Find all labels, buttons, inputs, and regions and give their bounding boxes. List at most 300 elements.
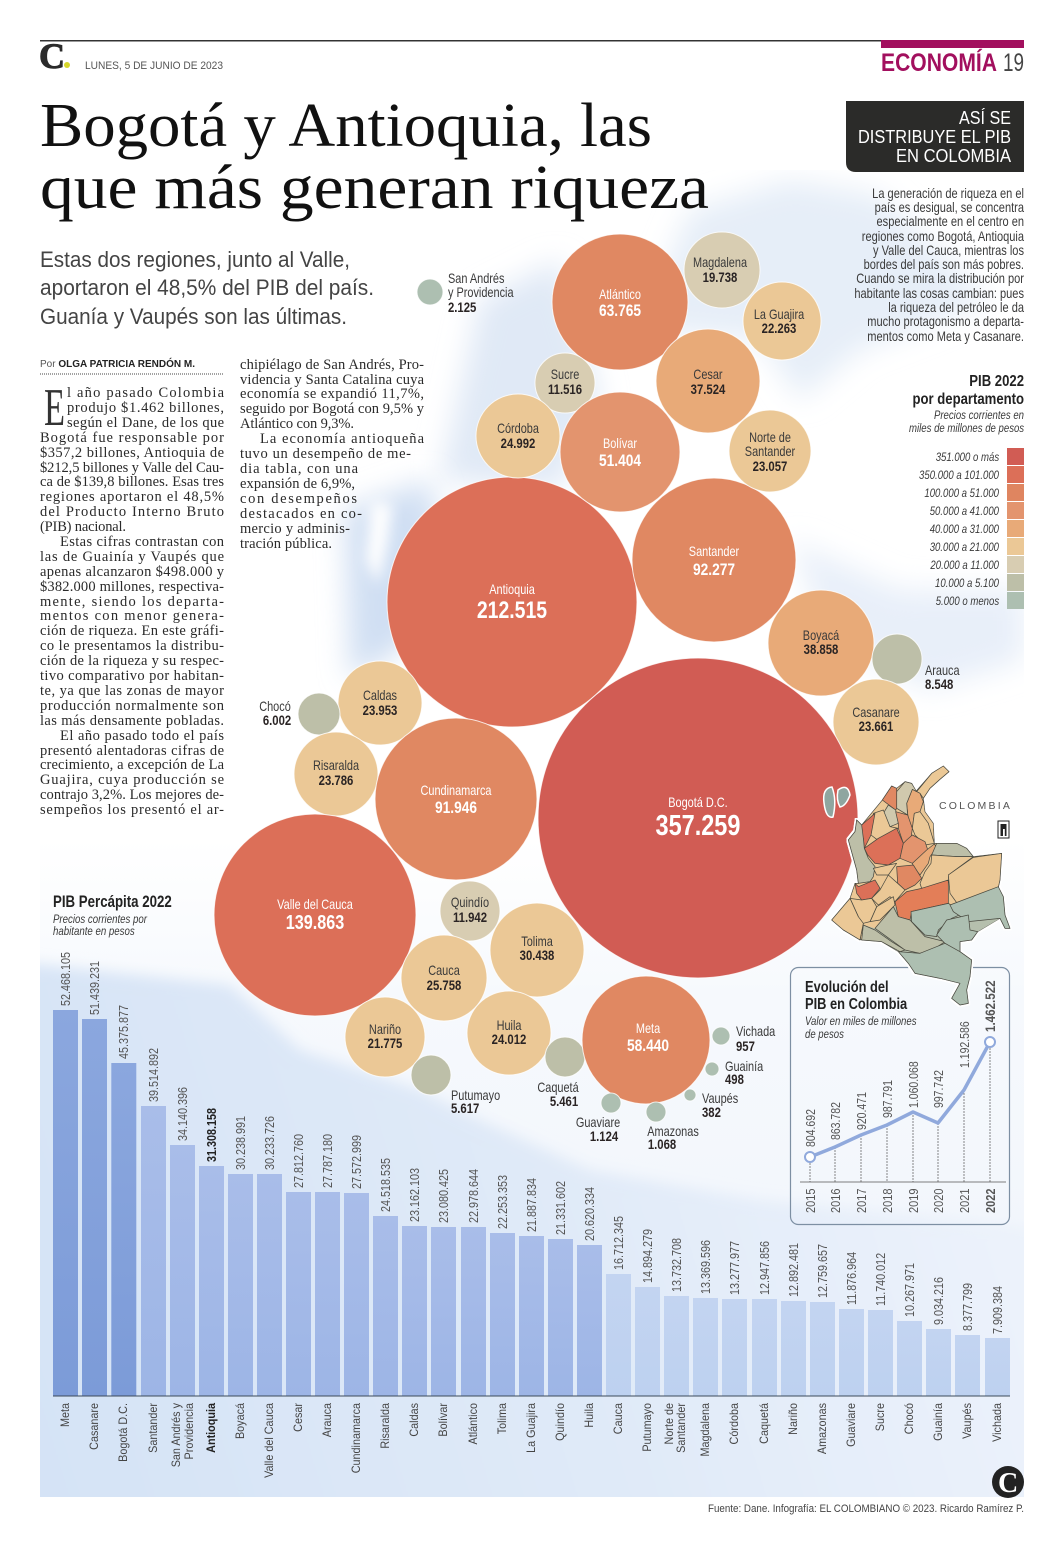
- bubble: Atlántico: [552, 234, 688, 370]
- bubble: La Guajira: [743, 282, 821, 360]
- bubble: Chocó: Chocó: [259, 699, 291, 714]
- legend: PIB 2022 por departamento: 50.000 a 41.000: [930, 505, 999, 518]
- bubble: Vaupés: 382: [702, 1104, 721, 1120]
- bar labels: Chocó: [904, 1403, 916, 1434]
- header box: Así se distribuye el PIB: ASÍ SE: [959, 108, 1011, 128]
- bar labels: Antioquia: [206, 1402, 218, 1453]
- subtitle: aportaron el 48,5% del PIB del país.: [40, 275, 374, 300]
- bar labels: Vaupés: [962, 1403, 974, 1439]
- bubble: Córdoba: [476, 394, 560, 478]
- bubble: Nariño: [345, 997, 425, 1077]
- map: Bolívar: [896, 812, 912, 843]
- bubble: Bogotá D.C.: Bogotá D.C.: [668, 795, 728, 810]
- bubble: Arauca: Arauca: [925, 663, 960, 678]
- bubble: Amazonas: Amazonas: [647, 1124, 699, 1139]
- map: Caldas: [873, 863, 897, 875]
- bars: [53, 1010, 1010, 1396]
- bubble: Casanare: 23.661: [859, 718, 893, 734]
- bar labels: Vichada: [992, 1402, 1004, 1442]
- article column 2: [240, 357, 425, 552]
- intro paragraph right: la riqueza del petróleo le da: [888, 300, 1024, 315]
- bubble: Norte de Santander: [729, 410, 811, 492]
- bar values: 12.759.657: [815, 1244, 830, 1298]
- bar labels: Cundinamarca: [351, 1402, 363, 1473]
- bubble: Santander: 92.277: [693, 561, 735, 579]
- bar labels: Norte de: [664, 1403, 676, 1444]
- bar values: 11.740.012: [873, 1253, 888, 1306]
- intro paragraph right: La generación de riqueza en el: [872, 186, 1024, 201]
- bubble: Caldas: [338, 661, 422, 745]
- bar values: 12.947.856: [757, 1241, 772, 1295]
- bubble: Huila: [467, 991, 551, 1075]
- bubble: Guainía: 498: [725, 1071, 744, 1087]
- map: Vichada: [950, 887, 1010, 928]
- bar values: 27.787.180: [320, 1134, 335, 1188]
- chart years: 2015: [804, 1188, 818, 1213]
- article column 1: las de Guainía y Vaupés que: [40, 549, 224, 565]
- masthead rule: [40, 40, 1024, 48]
- bar labels: San Andrés y: [171, 1403, 183, 1467]
- bar labels: Risaralda: [380, 1402, 392, 1449]
- article column 1: apenas alcanzaron $498.000 y: [40, 564, 225, 580]
- intro paragraph right: habitante las cosas cambian: pues: [854, 286, 1024, 301]
- chart years: 2021: [958, 1189, 972, 1213]
- bubble: Sucre: Sucre: [551, 367, 579, 382]
- bar values: 45.375.877: [116, 1005, 131, 1059]
- article column 1: ción de riqueza. En este gráfi-: [40, 623, 224, 639]
- subtitle: [40, 247, 374, 329]
- per capita heading: habitante en pesos: [53, 925, 135, 938]
- map: Casanare: [920, 855, 973, 888]
- bubble: Magdalena: 19.738: [703, 269, 737, 285]
- bar labels: Guaviare: [846, 1403, 858, 1447]
- bar labels: Huila: [584, 1402, 596, 1428]
- header box: Así se distribuye el PIB: DISTRIBUYE EL PIB: [858, 127, 1011, 147]
- chart years: 2017: [855, 1189, 869, 1213]
- map: Antioquia: [864, 828, 903, 865]
- legend: PIB 2022 por departamento: [909, 373, 1025, 609]
- byline: Por OLGA PATRICIA RENDÓN M.: [40, 357, 195, 370]
- map: Córdoba: [871, 810, 898, 839]
- article column 2: La economía antioqueña: [260, 431, 425, 447]
- chart years: 2016: [829, 1188, 843, 1213]
- article column 1: del Producto Interno Bruto: [40, 504, 224, 520]
- map: Putumayo: [862, 925, 905, 952]
- chart heading: PIB en Colombia: [805, 996, 908, 1013]
- bar labels: Boyacá: [235, 1402, 247, 1439]
- section label: 19: [1003, 49, 1024, 77]
- bar values: 21.887.834: [524, 1178, 539, 1232]
- bubble: Boyacá: 38.858: [804, 641, 838, 657]
- map: Norte de Santander: [912, 812, 934, 845]
- chart values: 997.742: [933, 1070, 946, 1108]
- line chart panel: Evolución del PIB: [790, 968, 1010, 1224]
- chart heading: de pesos: [805, 1028, 844, 1041]
- bar labels: Bolívar: [438, 1403, 450, 1437]
- per capita heading: Precios corrientes por: [53, 913, 147, 926]
- bubble: Putumayo: 5.617: [451, 1100, 479, 1116]
- bar values: 24.518.535: [378, 1158, 393, 1212]
- bar values: 31.308.158: [204, 1108, 219, 1162]
- map: Sucre: [883, 805, 898, 827]
- bubble: Vichada: Vichada: [736, 1024, 775, 1039]
- bubble: Cauca: 25.758: [427, 977, 461, 993]
- bubble: San Andrés y Providencia: [417, 271, 514, 315]
- line: GDP evolution: [810, 1042, 990, 1157]
- bubble: Atlántico: Atlántico: [599, 287, 641, 302]
- title: que más generan riqueza: [40, 154, 709, 222]
- article column 2: Atlántico con 9,3%.: [240, 416, 354, 432]
- bar labels: Putumayo: [642, 1403, 654, 1452]
- article column 1: l año pasado Colombia: [67, 385, 225, 401]
- map: Vichada tan: [948, 853, 1002, 905]
- article column 1: contrajo 3,2%. Los mejores de-: [40, 787, 224, 803]
- article column 1: según el Dane, de los que: [67, 415, 224, 431]
- drop cap: E: [44, 379, 65, 437]
- map: Huila: [870, 897, 895, 922]
- bar labels: Guainía: [933, 1402, 945, 1441]
- bubble: Cauca: Cauca: [428, 963, 460, 978]
- map: Meta: [895, 880, 948, 920]
- bubble: Tolima: 30.438: [520, 947, 554, 963]
- bar values: 30.238.991: [233, 1116, 248, 1170]
- bar values: 9.034.216: [931, 1277, 946, 1325]
- chart values: 804.692: [805, 1109, 818, 1147]
- bar values: 21.331.602: [553, 1181, 568, 1235]
- bar labels: Casanare: [89, 1403, 101, 1450]
- bubble: Huila: 24.012: [492, 1031, 526, 1047]
- bar values: 22.978.644: [466, 1169, 481, 1223]
- bubble: Norte de Santander: 23.057: [753, 458, 787, 474]
- article column 1: $212,5 billones y Valle del Cau-: [40, 460, 224, 476]
- bubble: Norte de Santander: Santander: [745, 444, 795, 459]
- legend: PIB 2022 por departamento: 10.000 a 5.100: [935, 577, 999, 590]
- map: Atrato: [857, 813, 875, 848]
- article column 1: producción normalmente son: [40, 698, 225, 714]
- bubble: Arauca: [872, 634, 960, 692]
- legend: PIB 2022 por departamento: 40.000 a 31.000: [930, 523, 999, 536]
- bar values: 27.812.760: [291, 1134, 306, 1188]
- bar labels: La Guajira: [526, 1402, 538, 1453]
- bubble: Antioquia: [387, 477, 637, 727]
- chart years: 2022: [984, 1188, 998, 1213]
- bar labels: Cauca: [613, 1402, 625, 1434]
- bar values: 34.140.396: [175, 1087, 190, 1141]
- bar labels: Arauca: [322, 1402, 334, 1437]
- bubble: Amazonas: 1.068: [648, 1136, 676, 1152]
- map: Chocó: [848, 820, 875, 883]
- article column 1: (PIB) nacional.: [40, 519, 126, 535]
- chart values: 920.471: [856, 1092, 869, 1130]
- bubble: Antioquia: 212.515: [477, 596, 547, 623]
- article column 2: dia tabla, con una: [240, 461, 359, 477]
- article column 1: Estas cifras contrastan con: [60, 534, 225, 550]
- bubble: Magdalena: [684, 232, 760, 308]
- bubble: Atlántico: 63.765: [599, 302, 641, 320]
- bubble: Cesar: 37.524: [691, 381, 725, 397]
- map: Santander: [900, 835, 928, 863]
- bubble: Guainía: [705, 1059, 763, 1087]
- article column 1: las más densamente pobladas.: [40, 713, 224, 729]
- map label: COLOMBIA: COLOMBIA: [939, 800, 1012, 812]
- bubble: Valle del Cauca: [214, 814, 416, 1016]
- header box: Así se distribuye el PIB: [846, 101, 1024, 172]
- title: [40, 92, 709, 222]
- bubble: Vaupés: Vaupés: [702, 1091, 738, 1106]
- legend: PIB 2022 por departamento: Precios corrientes en: [934, 409, 1024, 422]
- map: Valle: [855, 880, 880, 900]
- bar values: 10.267.971: [902, 1263, 917, 1317]
- bar values: 8.377.799: [960, 1283, 975, 1331]
- bubble: Vichada: 957: [736, 1038, 755, 1054]
- chart values: 987.791: [882, 1080, 895, 1118]
- article column 2: seguido por Bogotá con 9,5% y: [240, 401, 425, 417]
- bar labels: [60, 1402, 1004, 1478]
- chart heading: Valor en miles de millones: [805, 1015, 917, 1028]
- bubble: Antioquia: Antioquia: [489, 582, 535, 597]
- bubble: Boyacá: [768, 590, 874, 696]
- article column 1: regiones aportaron el 48,5%: [40, 489, 224, 505]
- bubble: Quindío: 11.942: [453, 909, 487, 925]
- bar values: 23.080.425: [436, 1169, 451, 1223]
- bar chart: PIB per capita: [53, 952, 1010, 1478]
- bubble: Bogotá D.C.: 357.259: [656, 809, 740, 842]
- intro paragraph right: país es desigual, se concentra: [875, 200, 1024, 215]
- article column 2: destacados en co-: [240, 506, 362, 522]
- icon: San Andrés islands inset: [824, 787, 850, 817]
- bubble: La Guajira: La Guajira: [754, 307, 804, 322]
- bubble: San Andrés y Providencia: 2.125: [448, 299, 476, 315]
- article column 1: $382.000 millones, respectiva-: [40, 579, 224, 595]
- article column 1: produjo $1.462 billones,: [67, 400, 224, 416]
- article column 1: crecimiento, a excepción de La: [40, 757, 225, 773]
- bar values: [58, 952, 1005, 1334]
- bar labels: Tolima: [497, 1402, 509, 1434]
- bar labels: Córdoba: [729, 1402, 741, 1444]
- bar labels: Caldas: [409, 1403, 421, 1437]
- chart values: 1.192.586: [959, 1021, 972, 1068]
- article column 2: tración pública.: [240, 536, 332, 552]
- chart years: 2020: [932, 1188, 946, 1213]
- bubble: Meta: 58.440: [627, 1037, 669, 1055]
- legend: PIB 2022 por departamento: 5.000 o menos: [936, 595, 1000, 608]
- bubble: Bolívar: 51.404: [599, 452, 641, 470]
- map: silhouette north: [832, 766, 1010, 1005]
- chart years: [804, 1188, 998, 1213]
- intro paragraph right: mucho protagonismo a departa-: [867, 314, 1024, 329]
- bubble: Norte de Santander: Norte de: [749, 430, 791, 445]
- bubble: Risaralda: 23.786: [319, 772, 353, 788]
- map: Colombia departments: [832, 766, 1010, 1005]
- bubble: Boyacá: Boyacá: [803, 628, 839, 643]
- bar labels: Nariño: [788, 1403, 800, 1435]
- bubble: Chocó: 6.002: [263, 712, 291, 728]
- bar labels: Amazonas: [817, 1403, 829, 1454]
- bubble: Guainía: Guainía: [725, 1059, 763, 1074]
- chart heading: Evolución del: [805, 979, 889, 996]
- bubble: Cundinamarca: Cundinamarca: [421, 783, 492, 798]
- bubble: Casanare: [833, 679, 919, 765]
- bar labels: Santander: [676, 1403, 688, 1453]
- map: Tolima: [872, 875, 905, 905]
- chart years: 2019: [907, 1189, 921, 1213]
- bar values: 22.253.353: [495, 1175, 510, 1229]
- article column 1: [40, 385, 225, 818]
- bubble: San Andrés y Providencia: y Providencia: [448, 285, 514, 300]
- bubble: Cesar: Cesar: [693, 367, 723, 382]
- bubble: Tolima: [490, 903, 584, 997]
- chart values: 1.060.068: [908, 1061, 921, 1108]
- article column 1: mentos con menor genera-: [40, 608, 224, 624]
- bar values: 30.233.726: [262, 1116, 277, 1170]
- bar values: 20.620.334: [582, 1187, 597, 1241]
- article column 1: Bogotá fue responsable por: [40, 430, 224, 446]
- article column 1: mente, siendo los departa-: [40, 594, 224, 610]
- bubble: San Andrés y Providencia: San Andrés: [448, 271, 504, 286]
- bubble: Guaviare: 1.124: [590, 1128, 618, 1144]
- bar labels: Quindío: [555, 1403, 567, 1441]
- article column 1: Guajira, cuya producción se: [40, 772, 224, 788]
- article column 1: presentó alentadoras cifras de: [40, 743, 224, 759]
- bubble: Cundinamarca: 91.946: [435, 799, 477, 817]
- bubble: Valle del Cauca: Valle del Cauca: [277, 897, 353, 912]
- bubble: Sucre: [535, 353, 595, 413]
- bar values: 14.894.279: [640, 1229, 655, 1283]
- legend: PIB 2022 por departamento: PIB 2022: [969, 373, 1024, 390]
- article column 1: El año pasado todo el país: [60, 728, 224, 744]
- bubble: Valle del Cauca: 139.863: [286, 911, 344, 933]
- map: Boyacá: [912, 844, 937, 875]
- bubble: Risaralda: [294, 732, 378, 816]
- bar labels: Valle del Cauca: [264, 1402, 276, 1478]
- section label: ECONOMÍA: [881, 48, 997, 77]
- article column 2: videncia y Santa Catalina cuya: [240, 372, 425, 388]
- bar values: 11.876.964: [844, 1252, 859, 1305]
- bubble: Casanare: Casanare: [852, 705, 900, 720]
- bar labels: Santander: [148, 1403, 160, 1453]
- title: Bogotá y Antioquia, las: [40, 92, 652, 160]
- source credit: Fuente: Dane. Infografía: EL COLOMBIANO © 2023. Ricardo Ramírez P.: [708, 1503, 1024, 1515]
- bar values: 13.732.708: [669, 1238, 684, 1292]
- bar values: 7.909.384: [990, 1286, 1005, 1334]
- bubble: Caldas: Caldas: [363, 688, 397, 703]
- bar values: 27.572.999: [349, 1135, 364, 1189]
- legend: PIB 2022 por departamento: por departamento: [913, 391, 1024, 408]
- article column 1: ca de $139,8 billones. Esas tres: [40, 474, 224, 490]
- map: Cesar: [907, 789, 923, 828]
- map: Caquetá: [875, 907, 945, 953]
- legend: PIB 2022 por departamento: 351.000 o más: [936, 451, 1000, 464]
- bubble: Bolívar: Bolívar: [603, 436, 637, 451]
- bubble: Tolima: Tolima: [521, 934, 553, 949]
- legend: PIB 2022 por departamento: 100.000 a 51.000: [924, 487, 999, 500]
- bubble: Meta: Meta: [636, 1021, 660, 1036]
- per capita heading: PIB Percápita 2022: [53, 894, 172, 911]
- bubble: Nariño: 21.775: [368, 1035, 402, 1051]
- map: Nariño: [832, 898, 863, 940]
- subtitle: Guanía y Vaupés son las últimas.: [40, 304, 347, 329]
- bar labels: Caquetá: [759, 1402, 771, 1444]
- chart years: 2018: [881, 1188, 895, 1213]
- bar values: 12.892.481: [786, 1243, 801, 1297]
- bar values: 52.468.105: [58, 952, 73, 1006]
- bubble: Putumayo: [411, 1055, 500, 1116]
- map: Arauca: [932, 843, 973, 857]
- bubble: Caldas: 23.953: [363, 702, 397, 718]
- legend: PIB 2022 por departamento: 20.000 a 11.000: [930, 559, 999, 572]
- article column 1: co le presentamos la distribu-: [40, 638, 224, 654]
- bubble: Huila: Huila: [497, 1018, 522, 1033]
- bubble: Amazonas: [646, 1102, 699, 1152]
- bubble: Arauca: 8.548: [925, 676, 953, 692]
- bar labels: Atlántico: [468, 1403, 480, 1444]
- bubble: Cundinamarca: [375, 718, 537, 880]
- intro paragraph right: regiones como Bogotá, Antioquia: [862, 229, 1024, 244]
- article column 2: con desempeños: [240, 491, 357, 507]
- map: Amazonas: [898, 943, 972, 1005]
- article column 2: economía se expandió 11,7%,: [240, 386, 424, 402]
- bubbles: PIB by department: [214, 232, 960, 1152]
- footer logo: [992, 1466, 1024, 1499]
- map: Cundinamarca: [897, 865, 922, 890]
- bubble: Caquetá: 5.461: [550, 1093, 578, 1109]
- bubble: Cesar: [656, 329, 760, 433]
- article column 1: sempeños los presentó el ar-: [40, 802, 224, 818]
- bar labels: Cesar: [293, 1403, 305, 1432]
- article column 1: te, ya que las zonas de mayor: [40, 683, 224, 699]
- chart values: 863.782: [830, 1102, 843, 1140]
- intro paragraph right: especialmente en el centro en: [877, 214, 1024, 229]
- article column 1: ción de la riqueza y su respec-: [40, 653, 224, 669]
- bubble: Córdoba: Córdoba: [497, 421, 539, 436]
- bar labels: Sucre: [875, 1403, 887, 1431]
- bubble: Chocó: [259, 693, 340, 735]
- bubble: Santander: [632, 478, 796, 642]
- bubble: Sucre: 11.516: [548, 381, 582, 397]
- bubble: Risaralda: Risaralda: [313, 758, 359, 773]
- map: Cauca: [850, 898, 877, 940]
- header box: Así se distribuye el PIB: EN COLOMBIA: [896, 146, 1011, 166]
- bar labels: Meta: [60, 1402, 72, 1427]
- bubble: Bogotá D.C.: [538, 658, 858, 978]
- subtitle: Estas dos regiones, junto al Valle,: [40, 247, 350, 272]
- bubble: Córdoba: 24.992: [501, 435, 535, 451]
- date line: LUNES, 5 DE JUNIO DE 2023: [85, 60, 223, 72]
- article column 2: chipiélago de San Andrés, Pro-: [240, 357, 424, 373]
- intro paragraph right: mentos como Meta y Casanare.: [867, 329, 1024, 344]
- bubble: Bolívar: [560, 392, 680, 512]
- article column 1: tivo comparativo por habitan-: [40, 668, 224, 684]
- bubble: Quindío: Quindío: [451, 895, 489, 910]
- chart values: [805, 980, 998, 1147]
- background: map haze and gradient panel: [40, 176, 1024, 1497]
- article column 2: mercio y adminis-: [240, 521, 350, 537]
- bubble: Santander: Santander: [689, 544, 739, 559]
- legend: PIB 2022 por departamento: 30.000 a 21.000: [930, 541, 999, 554]
- article column 2: tuvo un desempeño de me-: [240, 446, 411, 462]
- chart values: 1.462.522: [983, 980, 998, 1032]
- intro paragraph right: Cuando se mira la distribución por: [856, 271, 1024, 286]
- bar values: 51.439.231: [87, 961, 102, 1015]
- map: Guainía: [937, 915, 978, 960]
- bubble: Cauca: [401, 935, 487, 1021]
- logo: El Colombiano C: C: [39, 36, 65, 76]
- bubble: Caquetá: [537, 1037, 585, 1109]
- bar labels: Magdalena: [700, 1402, 712, 1456]
- bubble: Quindío: [440, 881, 500, 941]
- map: Atlántico: [882, 786, 897, 810]
- article column 2: expansión de 6,9%,: [240, 476, 355, 492]
